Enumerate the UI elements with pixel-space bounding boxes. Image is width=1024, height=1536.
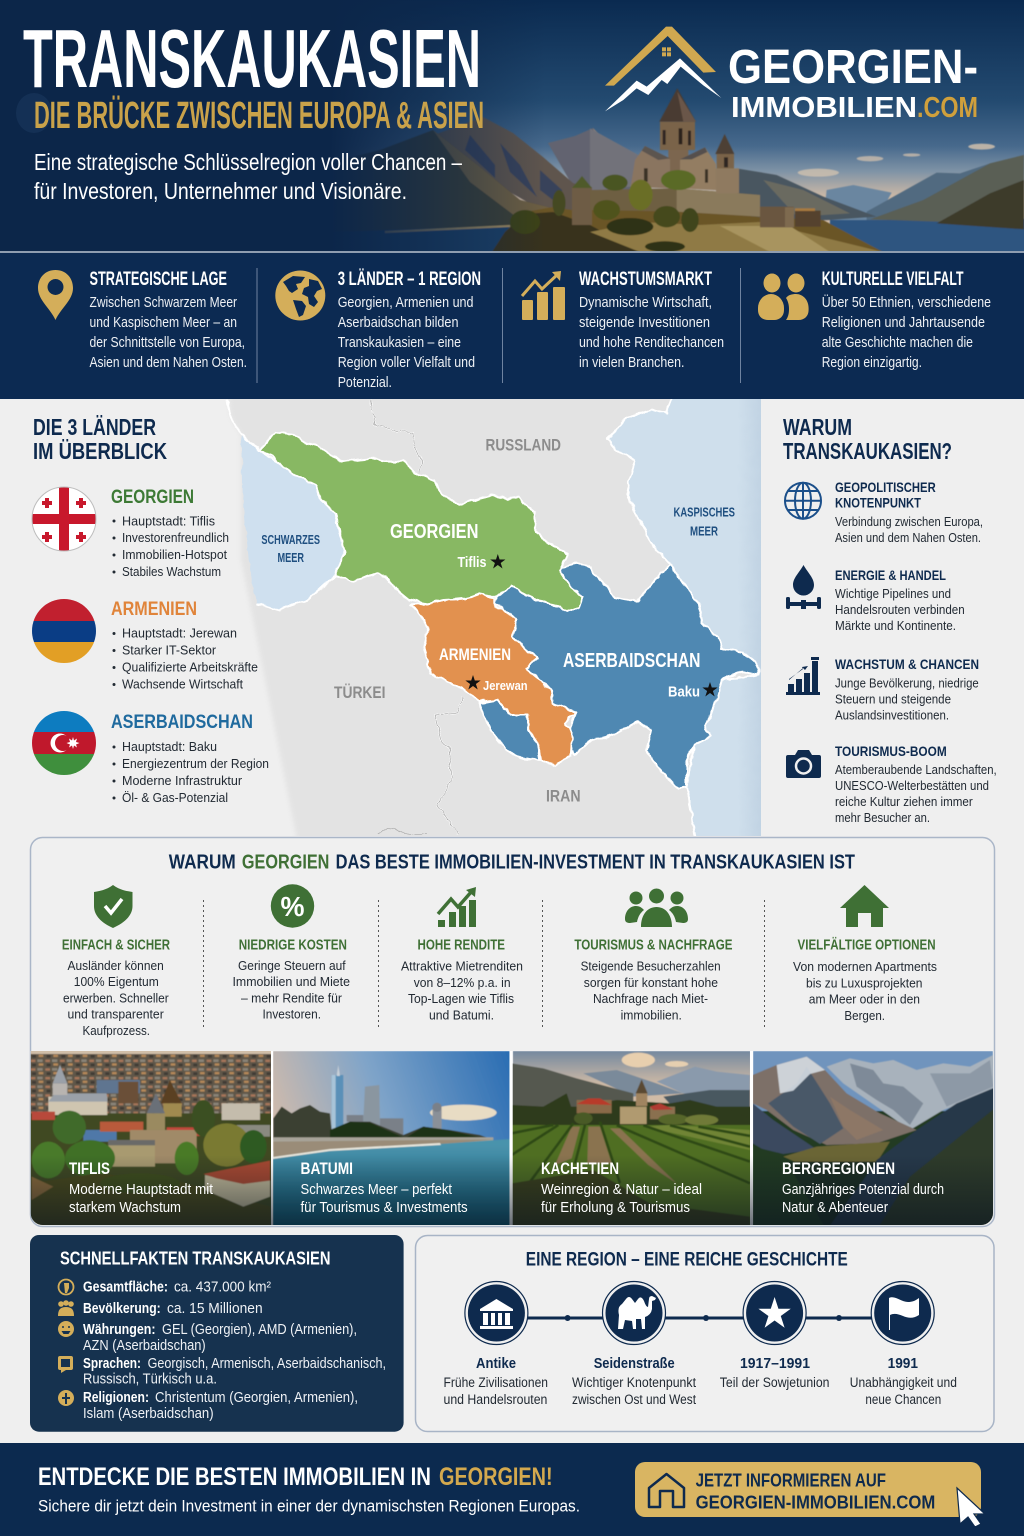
- feature: 3 Länder: Region voller Vielfalt und: [338, 354, 475, 371]
- caption: Tiflis: starkem Wachstum: [69, 1199, 181, 1216]
- milestone: Unabhängigkeit: neue Chancen: [865, 1392, 941, 1407]
- caption: Batumi: für Tourismus & Investments: [300, 1199, 468, 1216]
- title: TRANSKAUKASIEN: [23, 12, 481, 105]
- section heading: WARUM: [169, 851, 236, 873]
- column: einfach und sicher: Ausländer können: [68, 958, 164, 973]
- icon: house outline: [649, 1474, 684, 1507]
- heading: IM ÜBERBLICK: [33, 438, 167, 464]
- section heading: GEORGIEN: [242, 851, 329, 873]
- feature: strategische Lage: STRATEGISCHE LAGE: [90, 268, 227, 290]
- country: Georgien: Stabiles Wachstum: [122, 564, 221, 579]
- feature: 3 Länder: Transkaukasien – eine: [338, 334, 461, 351]
- tagline: für Investoren, Unternehmer und Visionäre.: [34, 178, 407, 204]
- item: Tourismus-Boom: [835, 743, 997, 825]
- map labels: Baku: [668, 685, 700, 701]
- column: einfach und sicher: Kaufprozess.: [82, 1023, 150, 1038]
- item: Energie und Handel: [835, 567, 965, 633]
- feature: strategische Lage: Zwischen Schwarzem Meer: [90, 294, 237, 311]
- map labels: KASPISCHES: [674, 506, 735, 520]
- item: Energie und Handel: Handelsrouten verbinden: [835, 602, 965, 617]
- button: [635, 1462, 981, 1517]
- map labels: MEER: [278, 551, 304, 565]
- icon: flag: [871, 1282, 934, 1344]
- milestone: Antike: Frühe Zivilisationen: [444, 1375, 548, 1390]
- column: Tourismus und Nachfrage: immobilien.: [621, 1008, 682, 1022]
- item: Wachstum und Chancen: Steuern und steigende: [835, 692, 951, 707]
- milestone: Antike: [444, 1282, 548, 1407]
- icon: house: [840, 885, 889, 927]
- map labels: ARMENIEN: [439, 645, 511, 664]
- column: Tourismus und Nachfrage: sorgen für konstant hohe: [584, 975, 718, 990]
- logo: Georgien-Immobilien.com: IMMOBILIEN: [731, 92, 917, 124]
- photo strip: [30, 1050, 997, 1230]
- feature: 3 Länder: Aserbaidschan bilden: [338, 314, 458, 331]
- icon: percent: %: [280, 891, 305, 922]
- icon: rising chart: [438, 887, 476, 927]
- fact: Gesamtfläche: ca. 437.000 km²: [174, 1280, 271, 1296]
- icon: map pin: [38, 270, 73, 320]
- fact: Bevölkerung: [83, 1301, 263, 1317]
- caption: Batumi: Schwarzes Meer – perfekt: [300, 1181, 453, 1198]
- capital stars: [465, 554, 718, 696]
- feature: 3 Länder: Georgien, Armenien und: [338, 294, 474, 311]
- item: geopolitischer Knotenpunkt: GEOPOLITISCHER: [835, 479, 936, 495]
- column: Tourismus und Nachfrage: Steigende Besucherzahlen: [581, 959, 721, 974]
- column: hohe Rendite: von 8–12% p.a. in: [414, 975, 511, 990]
- column: niedrige Kosten: [232, 884, 350, 1022]
- Caspian Sea: [608, 393, 781, 847]
- map labels: IRAN: [546, 787, 581, 806]
- country: Armenien: Qualifizierte Arbeitskräfte: [122, 660, 258, 675]
- map labels: MEER: [690, 525, 718, 539]
- feature: strategische Lage: Asien und dem Nahen Osten.: [90, 354, 247, 371]
- Black Sea: [242, 435, 345, 610]
- feature: kulturelle Vielfalt: Religionen und Jahrtausende: [822, 314, 985, 331]
- icon: temple: [465, 1282, 528, 1344]
- feature: strategische Lage: [38, 268, 247, 371]
- item: Tourismus-Boom: UNESCO-Welterbestätten und: [835, 778, 989, 793]
- heading: WARUM: [783, 414, 852, 440]
- item: Tourismus-Boom: TOURISMUS-BOOM: [835, 743, 947, 759]
- column: einfach und sicher: erwerben. Schneller: [63, 990, 169, 1005]
- map labels: [261, 436, 735, 806]
- section heading: [169, 851, 855, 873]
- country: Georgien: GEORGIEN: [111, 486, 194, 508]
- fact: Religionen: [83, 1390, 358, 1422]
- column: Tourismus und Nachfrage: Nachfrage nach Miet-: [593, 991, 708, 1006]
- feature: 3 Länder: 3 LÄNDER – 1 REGION: [338, 267, 481, 290]
- column: niedrige Kosten: Geringe Steuern auf: [238, 958, 346, 973]
- column: vielfältige Optionen: [793, 885, 937, 1023]
- fact: Bevölkerung: ca. 15 Millionen: [167, 1301, 263, 1317]
- call to action headline: ENTDECKE DIE BESTEN IMMOBILIEN IN: [38, 1463, 431, 1491]
- caption: Kachetien: Weinregion & Natur – ideal: [541, 1181, 702, 1198]
- column: einfach und sicher: 100% Eigentum: [74, 974, 159, 989]
- photo: mountain lake with castle: [300, 88, 1024, 256]
- column: hohe Rendite: [401, 887, 523, 1022]
- milestone: Seidenstraße: Seidenstraße: [594, 1355, 675, 1372]
- item: Wachstum und Chancen: Junge Bevölkerung, niedrige: [835, 676, 979, 691]
- flag: Armenien: [32, 599, 96, 663]
- item: Energie und Handel: ENERGIE & HANDEL: [835, 567, 946, 583]
- milestone: Sowjetunion: Teil der Sowjetunion: [720, 1375, 830, 1390]
- country: Aserbaidschan: Energiezentrum der Region: [122, 756, 269, 771]
- logo: Georgien-Immobilien.com: [605, 27, 978, 124]
- feature: 3 Länder: [275, 267, 481, 391]
- feature strip: [0, 251, 1024, 399]
- column: vielfältige Optionen: Bergen.: [844, 1008, 885, 1023]
- map labels: GEORGIEN: [390, 521, 478, 543]
- feature: kulturelle Vielfalt: [758, 268, 991, 371]
- caption: Tiflis: Moderne Hauptstadt mit: [69, 1181, 214, 1198]
- flag: Aserbaidschan: [32, 711, 96, 775]
- icon: globe: [275, 270, 325, 320]
- fact: Sprachen: Russisch, Türkisch u.a.: [83, 1372, 217, 1388]
- map labels: RUSSLAND: [486, 436, 561, 455]
- column: einfach und sicher: und transparenter: [68, 1007, 164, 1022]
- caption: Bergregionen: BERGREGIONEN: [782, 1159, 895, 1178]
- milestone: Antike: Antike: [476, 1355, 516, 1372]
- heading: EINE REGION – EINE REICHE GESCHICHTE: [526, 1250, 848, 1271]
- column: niedrige Kosten: Investoren.: [262, 1007, 321, 1022]
- heading: DIE 3 LÄNDER: [33, 414, 156, 440]
- icon: group of people: [625, 888, 688, 927]
- item: Tourismus-Boom: Atemberaubende Landschaften,: [835, 762, 997, 777]
- fact: Währungen: Währungen:: [83, 1322, 156, 1338]
- feature: Wachstumsmarkt: und hohe Renditechancen: [579, 334, 724, 351]
- column: vielfältige Optionen: Von modernen Apartments: [793, 959, 937, 974]
- icon: people: [758, 274, 809, 320]
- item: Wachstum und Chancen: Auslandsinvestitionen.: [835, 708, 949, 723]
- feature: Wachstumsmarkt: [522, 268, 724, 371]
- heading: [783, 414, 952, 464]
- milestone: Sowjetunion: [720, 1282, 830, 1390]
- caption: Bergregionen: Ganzjähriges Potenzial durch: [782, 1181, 944, 1198]
- column: niedrige Kosten: Immobilien und Miete: [232, 974, 350, 989]
- call to action headline: GEORGIEN!: [439, 1463, 553, 1491]
- fact: Währungen: GEL (Georgien), AMD (Armenien),: [162, 1322, 357, 1338]
- item: geopolitischer Knotenpunkt: Asien und dem Nahen Osten.: [835, 530, 981, 545]
- flag: Georgien: [32, 487, 96, 551]
- column: hohe Rendite: Top-Lagen wie Tiflis: [408, 991, 514, 1006]
- heading: [33, 414, 167, 464]
- panel: Geschichte timeline: [416, 1236, 994, 1432]
- item: Energie und Handel: Wichtige Pipelines und: [835, 586, 951, 601]
- country: Armenien: Wachsende Wirtschaft: [122, 677, 243, 692]
- fact: Gesamtfläche: Gesamtfläche:: [83, 1280, 168, 1296]
- country: Aserbaidschan: Moderne Infrastruktur: [122, 773, 243, 788]
- photo: Batumi: [273, 1051, 510, 1228]
- feature: strategische Lage: und Kaspischem Meer – an: [90, 314, 237, 331]
- Aserbaidschan: [495, 563, 758, 788]
- column: Tourismus und Nachfrage: [574, 888, 733, 1022]
- milestone: Seidenstraße: zwischen Ost und West: [572, 1392, 696, 1407]
- caption: Kachetien: [541, 1159, 702, 1216]
- item: geopolitischer Knotenpunkt: Verbindung zwischen Europa,: [835, 514, 983, 529]
- country: Armenien: Hauptstadt: Jerewan: [122, 626, 237, 641]
- item: Wachstum und Chancen: WACHSTUM & CHANCEN: [835, 656, 979, 672]
- icon: star: [743, 1282, 806, 1344]
- button: JETZT INFORMIEREN AUF: [696, 1470, 886, 1491]
- panel: Schnellfakten: [30, 1235, 404, 1432]
- item: Wachstum und Chancen: [835, 656, 979, 723]
- caption: Tiflis: TIFLIS: [69, 1159, 110, 1178]
- panel: warum Transkaukasien: [761, 399, 1024, 836]
- column: hohe Rendite: Attraktive Mietrenditen: [401, 959, 523, 974]
- icon: oil drop and pipeline: [786, 565, 821, 609]
- country: Georgien: Immobilien-Hotspot: [122, 547, 227, 562]
- country: Georgien: Hauptstadt: Tiflis: [122, 513, 215, 528]
- header banner: [0, 0, 1024, 256]
- country: Armenien: Starker IT-Sektor: [122, 643, 217, 658]
- feature: Wachstumsmarkt: Dynamische Wirtschaft,: [579, 294, 712, 311]
- country: Aserbaidschan: Öl- & Gas-Potenzial: [122, 790, 228, 805]
- section heading: DAS BESTE IMMOBILIEN-INVESTMENT IN TRANSKAUKASIEN IST: [336, 851, 855, 873]
- timeline connector: [496, 1315, 903, 1321]
- fact: Religionen: Islam (Aserbaidschan): [83, 1406, 214, 1422]
- panel: die 3 Länder: [32, 414, 269, 805]
- caption: Tiflis: [69, 1162, 213, 1212]
- map labels: ASERBAIDSCHAN: [563, 650, 700, 672]
- item: Tourismus-Boom: mehr Besucher an.: [835, 810, 930, 825]
- map labels: Jerewan: [483, 678, 528, 693]
- fact: Bevölkerung: Bevölkerung:: [83, 1301, 161, 1317]
- country: Armenien: ARMENIEN: [111, 598, 197, 620]
- icon: cursor: [957, 1488, 985, 1527]
- icons: fact bullets: [58, 1280, 74, 1406]
- column: vielfältige Optionen: VIELFÄLTIGE OPTIONEN: [798, 936, 936, 953]
- tagline: Eine strategische Schlüsselregion voller Chancen –: [34, 149, 462, 175]
- column: niedrige Kosten: – mehr Rendite für: [241, 990, 343, 1005]
- milestone: Seidenstraße: Wichtiger Knotenpunkt: [572, 1375, 696, 1390]
- feature: 3 Länder: Potenzial.: [338, 374, 392, 391]
- caption: Kachetien: für Erholung & Tourismus: [541, 1199, 690, 1216]
- panel: map of the Transcaucasus: [226, 399, 761, 836]
- icon: camel: [602, 1282, 666, 1344]
- caption: Batumi: [300, 1162, 468, 1212]
- caption: Bergregionen: Natur & Abenteuer: [782, 1199, 888, 1216]
- button: GEORGIEN-IMMOBILIEN.COM: [696, 1491, 935, 1512]
- caption: Bergregionen: [782, 1162, 944, 1212]
- panel: warum Georgien: [30, 838, 994, 1226]
- milestone: Seidenstraße: [572, 1282, 696, 1407]
- country: Georgien: [111, 486, 229, 579]
- subtitle: DIE BRÜCKE ZWISCHEN EUROPA & ASIEN: [34, 94, 484, 137]
- milestone: Sowjetunion: 1917–1991: [740, 1355, 810, 1372]
- column: hohe Rendite: HOHE RENDITE: [418, 937, 505, 953]
- feature: kulturelle Vielfalt: Region einzigartig.: [822, 354, 922, 371]
- logo: Georgien-Immobilien.com: GEORGIEN-: [728, 41, 978, 94]
- photo: Tiflis: [30, 1050, 273, 1230]
- logo: Georgien-Immobilien.com: .COM: [917, 92, 978, 124]
- column: einfach und sicher: [62, 885, 170, 1038]
- fact: Religionen: Christentum (Georgien, Armenien),: [155, 1390, 358, 1406]
- icon: bar chart: [786, 657, 820, 695]
- item: geopolitischer Knotenpunkt: KNOTENPUNKT: [835, 495, 921, 511]
- country: Armenien: [111, 598, 258, 692]
- column: niedrige Kosten: NIEDRIGE KOSTEN: [239, 937, 347, 953]
- fact: Sprachen: Sprachen:: [83, 1356, 141, 1372]
- feature: kulturelle Vielfalt: alte Geschichte machen die: [822, 334, 973, 351]
- country: Aserbaidschan: ASERBAIDSCHAN: [111, 711, 253, 733]
- icon: camera: [786, 750, 821, 778]
- feature: Wachstumsmarkt: in vielen Branchen.: [579, 354, 684, 371]
- caption: Kachetien: KACHETIEN: [541, 1159, 619, 1178]
- map labels: Tiflis: [458, 555, 486, 571]
- country: Aserbaidschan: Hauptstadt: Baku: [122, 739, 217, 754]
- photo: Bergregionen: [753, 1051, 997, 1230]
- column: vielfältige Optionen: bis zu Luxusprojekten: [806, 976, 922, 990]
- call to action text: Sichere dir jetzt dein Investment in einer der dynamischsten Regionen Europas.: [38, 1497, 580, 1516]
- column: Tourismus und Nachfrage: TOURISMUS & NACHFRAGE: [574, 937, 733, 953]
- caption: Batumi: BATUMI: [300, 1159, 353, 1178]
- fact: Sprachen: [83, 1356, 386, 1388]
- icon: shield: [94, 885, 132, 928]
- milestone: Unabhängigkeit: 1991: [888, 1355, 918, 1372]
- item: Tourismus-Boom: reiche Kultur ziehen immer: [835, 794, 973, 809]
- photo: Kachetien: [512, 1051, 752, 1227]
- item: Energie und Handel: Märkte und Kontinente.: [835, 618, 956, 633]
- feature: strategische Lage: der Schnittstelle von Europa,: [90, 334, 245, 351]
- map labels: SCHWARZES: [261, 533, 320, 547]
- fact: Gesamtfläche: [83, 1280, 271, 1296]
- icon: rising bars: [522, 271, 565, 320]
- country: Georgien: Investorenfreundlich: [122, 530, 229, 545]
- feature: kulturelle Vielfalt: Über 50 Ethnien, verschiedene: [822, 293, 991, 311]
- feature: Wachstumsmarkt: steigende Investitionen: [579, 314, 710, 331]
- milestone: Unabhängigkeit: Unabhängigkeit und: [850, 1375, 957, 1390]
- milestone: Antike: und Handelsrouten: [444, 1392, 547, 1407]
- footer banner: [0, 1443, 1024, 1536]
- heading: SCHNELLFAKTEN TRANSKAUKASIEN: [60, 1248, 330, 1268]
- column: einfach und sicher: EINFACH & SICHER: [62, 937, 170, 953]
- map labels: TÜRKEI: [334, 683, 386, 702]
- Armenien: [411, 592, 576, 765]
- item: geopolitischer Knotenpunkt: [835, 479, 983, 545]
- fact: Sprachen: Georgisch, Armenisch, Aserbaidschanisch,: [148, 1356, 386, 1372]
- country: Aserbaidschan: [111, 711, 269, 805]
- column: vielfältige Optionen: am Meer oder in den: [809, 992, 920, 1006]
- Georgien: [260, 432, 583, 612]
- icon: roof and mountain: [605, 27, 721, 111]
- fact: Währungen: [83, 1322, 357, 1354]
- feature: Wachstumsmarkt: WACHSTUMSMARKT: [579, 268, 712, 290]
- column: hohe Rendite: und Batumi.: [429, 1008, 494, 1022]
- fact: Religionen: Religionen:: [83, 1390, 149, 1406]
- fact: Währungen: AZN (Aserbaidschan): [83, 1338, 206, 1354]
- heading: TRANSKAUKASIEN?: [783, 438, 952, 464]
- icon: globe grid: [785, 483, 821, 519]
- tagline: [34, 149, 462, 204]
- milestone: Unabhängigkeit: [850, 1282, 957, 1407]
